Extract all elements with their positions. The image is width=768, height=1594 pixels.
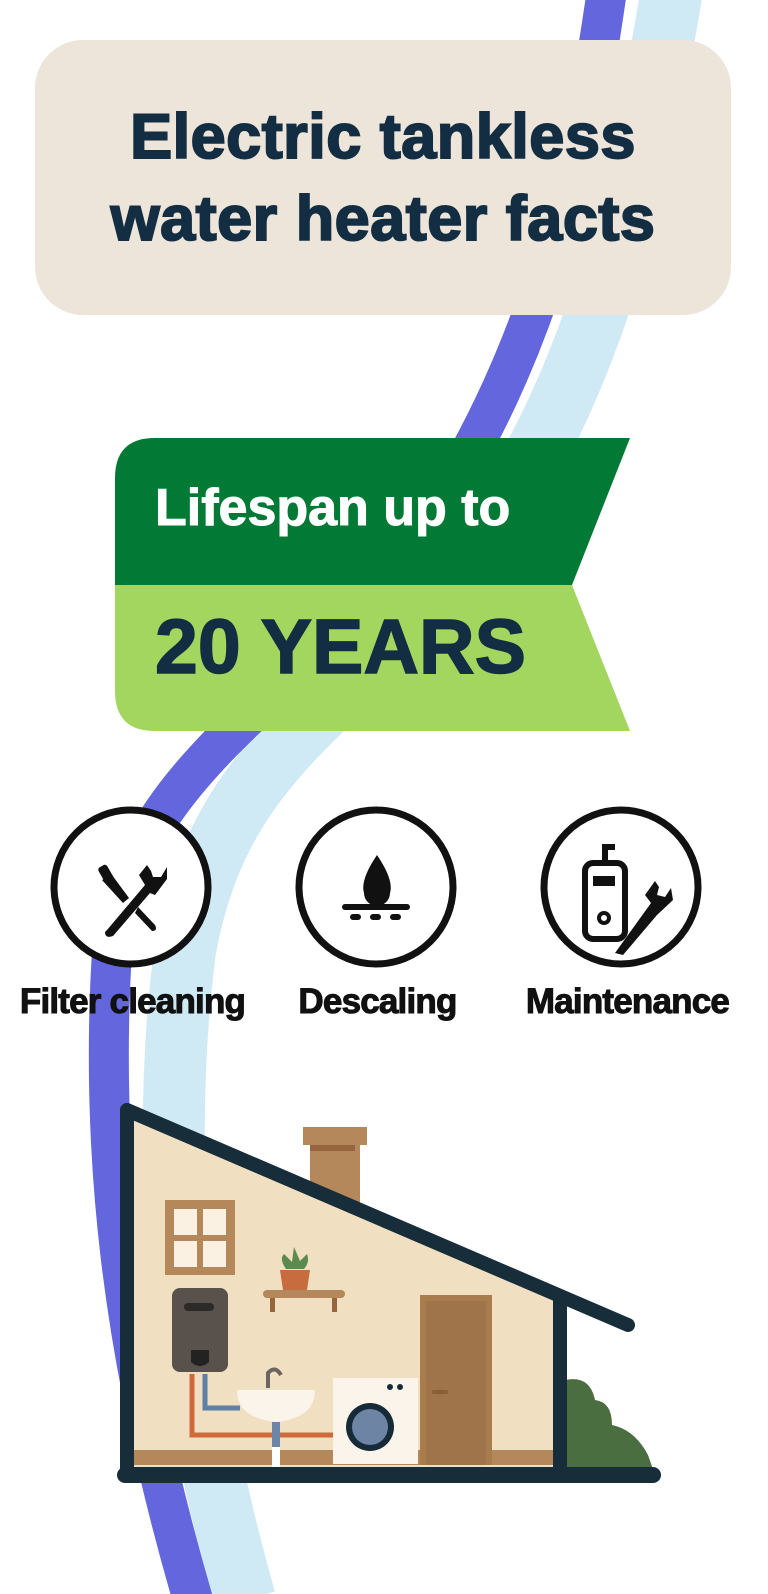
banner text: lifespan: Lifespan up to (155, 479, 510, 537)
wall (127, 1110, 560, 1475)
door (420, 1295, 492, 1465)
title panel (35, 40, 731, 315)
sink (237, 1369, 315, 1467)
icon: maintenance: Maintenance (526, 982, 729, 1021)
plant shelf (263, 1247, 345, 1312)
icon: filter cleaning: Filter cleaning (20, 982, 245, 1021)
banner text: 20 years: 20 YEARS (155, 604, 526, 690)
heater (172, 1288, 228, 1372)
icon: maintenance (526, 806, 730, 1021)
washing machine (333, 1378, 418, 1464)
lifespan banner (115, 438, 630, 731)
bush (565, 1379, 655, 1475)
chimney (303, 1127, 367, 1210)
window (165, 1200, 235, 1275)
icon: filter cleaning (20, 806, 245, 1021)
icon: descaling: Descaling (298, 982, 457, 1021)
title panel: Electric tankless (130, 102, 636, 172)
pipes (205, 1374, 240, 1408)
house illustration (117, 1103, 661, 1483)
icon: descaling (296, 806, 457, 1021)
house frame (127, 1110, 560, 1475)
title panel: water heater facts (111, 184, 655, 254)
